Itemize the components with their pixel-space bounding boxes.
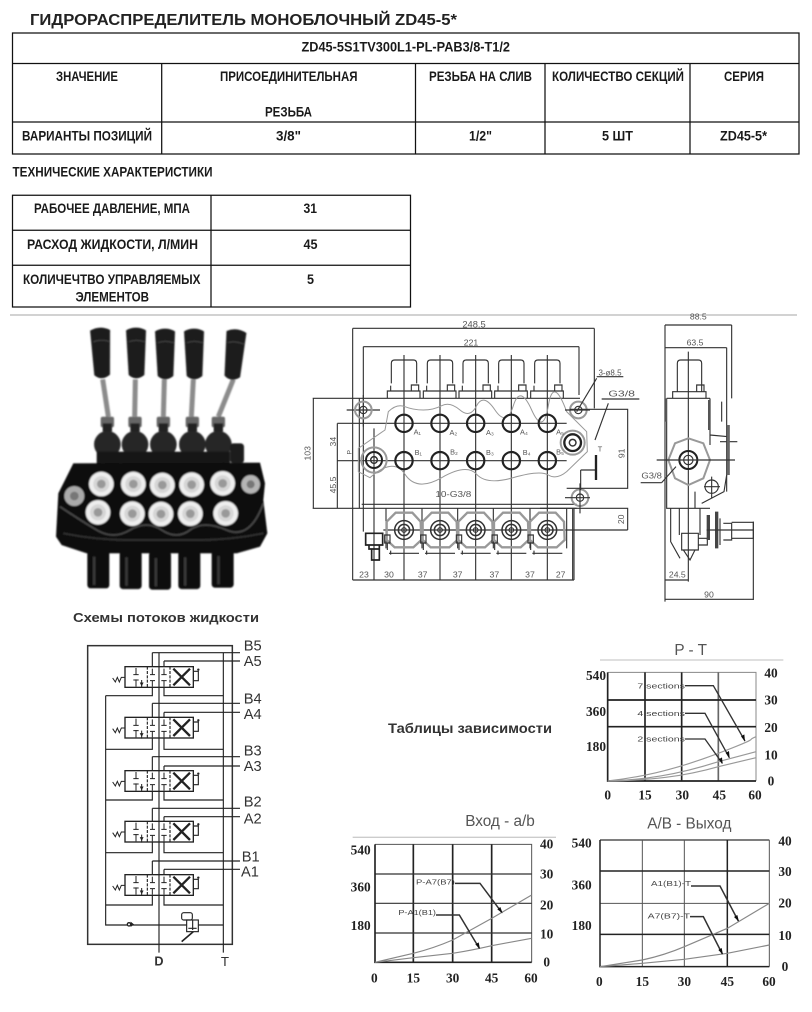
side view dimension labels: 88.5 (690, 312, 707, 322)
port labels (154, 639, 262, 969)
side view dimension labels: 24.5 (669, 570, 686, 580)
chart labels: P-A1(B1) (398, 908, 437, 917)
axis numbers: 20 (778, 896, 792, 911)
axis numbers: 540 (351, 842, 371, 857)
dimension labels: 37 (418, 570, 428, 580)
dimension labels: 10-G3/8 (435, 489, 472, 499)
value: drain thread: 1/2" (469, 128, 492, 144)
dimension labels: A₄ (520, 427, 528, 436)
axis numbers: 540 (586, 668, 606, 683)
header: количество секций: КОЛИЧЕСТВО СЕКЦИЙ (552, 67, 684, 84)
axis numbers: 0 (604, 787, 611, 802)
axis numbers: 60 (748, 787, 762, 802)
chart labels: A7(B7)-T (648, 912, 690, 921)
table: technical characteristics (12, 195, 410, 307)
chart labels: A1(B1)-T (651, 879, 691, 888)
dimension labels: P (347, 450, 354, 455)
port labels: A5 (244, 654, 262, 670)
chart labels (648, 879, 691, 921)
axis numbers: 0 (543, 955, 550, 970)
dimension labels: 37 (525, 570, 535, 580)
axis numbers: 0 (782, 959, 789, 974)
dimension labels: 45.5 (328, 476, 338, 493)
technical drawing: front view with dimensions (303, 320, 639, 580)
axis numbers: 180 (586, 739, 606, 754)
axis numbers: 180 (351, 918, 371, 933)
axis numbers: 30 (764, 692, 778, 707)
axis numbers (351, 837, 554, 986)
header: присоединительная резьба: ПРИСОЕДИНИТЕЛЬНАЯ (220, 68, 358, 84)
header: значение: ЗНАЧЕНИЕ (56, 68, 118, 84)
axis numbers: 20 (764, 720, 778, 735)
chart labels: P-A7(B7) (416, 877, 456, 886)
model code: ZD45-5S1TV300L1-PL-PAB3/8-T1/2 (302, 38, 510, 54)
header: присоединительная резьба (220, 68, 358, 120)
dimension labels: 248.5 (462, 320, 486, 330)
axis numbers (586, 666, 778, 802)
flow label: РАСХОД ЖИДКОСТИ, Л/МИН (27, 236, 198, 252)
axis numbers: 10 (540, 927, 554, 942)
valve sections (113, 667, 199, 896)
relief valve (182, 913, 198, 942)
dimension labels: 23 (359, 570, 369, 580)
dimension labels: A₂ (449, 428, 457, 437)
axis numbers: 10 (778, 928, 792, 943)
dimension labels: A₃ (486, 428, 494, 437)
dimension labels: 37 (453, 570, 463, 580)
pressure value: 31 (304, 200, 317, 216)
chart labels: 4 sections (637, 709, 685, 718)
axis numbers (572, 833, 792, 989)
controlled elements (23, 271, 201, 304)
port labels: D (154, 954, 164, 968)
chart: A/B to outlet (572, 815, 792, 989)
port labels: A2 (244, 811, 262, 827)
port labels: B4 (244, 691, 262, 707)
chart labels (637, 681, 685, 744)
dimension labels: A₅ (556, 427, 564, 436)
axis numbers: 45 (713, 787, 726, 802)
axis numbers: 15 (407, 971, 420, 986)
dimension labels: 221 (464, 338, 478, 348)
chart: A/B to outlet: A/B - Выход (647, 815, 731, 832)
axis numbers: 30 (446, 971, 460, 986)
dimension labels: 34 (328, 437, 338, 446)
port labels: A3 (244, 759, 262, 775)
value: sections: 5 ШТ (602, 128, 633, 144)
axis numbers: 30 (678, 974, 691, 989)
axis numbers: 40 (764, 666, 778, 681)
axis numbers: 540 (572, 836, 592, 851)
chart labels: 7 sections (637, 681, 685, 690)
port labels: A4 (244, 707, 262, 723)
port labels: A1 (241, 865, 259, 881)
chart labels: 2 sections (637, 735, 685, 744)
dimension labels: B₃ (486, 448, 494, 457)
flow: 45 (304, 236, 318, 252)
controlled elements: ЭЛЕМЕНТОВ (76, 288, 149, 304)
chart: inlet to a/b: Вход - a/b (465, 813, 535, 830)
axis numbers: 0 (371, 971, 378, 986)
axis numbers: 20 (540, 897, 554, 912)
side view dimension labels: 63.5 (687, 338, 704, 348)
axis numbers: 60 (762, 974, 776, 989)
header: присоединительная резьба: РЕЗЬБА (265, 104, 312, 120)
chart: inlet to a/b (351, 813, 556, 986)
header: резьба на слив: РЕЗЬБА НА СЛИВ (429, 68, 532, 84)
axis numbers: 360 (351, 880, 371, 895)
port labels: T (221, 954, 229, 969)
axis numbers: 30 (676, 787, 689, 802)
side view dimension labels: G3/8 (641, 470, 662, 480)
product photo: hydraulic valve (56, 327, 267, 590)
dimension labels: 3-ø8.5 (598, 369, 622, 378)
dimension labels: T (598, 445, 603, 454)
axis numbers: 30 (778, 864, 792, 879)
axis numbers: 15 (636, 974, 649, 989)
axis numbers: 0 (596, 974, 603, 989)
dimension labels: B₁ (415, 448, 423, 457)
dimension labels: 30 (384, 570, 394, 580)
port labels: B2 (244, 795, 262, 811)
dimension labels: 91 (616, 448, 626, 458)
dimension labels: A₁ (414, 427, 422, 436)
axis numbers: 360 (586, 704, 606, 719)
side view dimension labels: 90 (704, 590, 714, 600)
header: серия: СЕРИЯ (724, 68, 764, 84)
value: series: ZD45-5* (720, 128, 767, 144)
axis numbers: 60 (524, 971, 538, 986)
pressure: РАБОЧЕЕ ДАВЛЕНИЕ, МПА (34, 200, 190, 216)
dimension labels: B₅ (556, 447, 564, 456)
dimension labels: 103 (303, 446, 313, 461)
hydraulic schematic (88, 639, 262, 969)
axis numbers: 30 (540, 867, 554, 882)
axis numbers: 45 (485, 971, 499, 986)
caption: dependency tables: Таблицы зависимости (388, 721, 552, 736)
dimension labels: B₂ (450, 447, 458, 456)
dimension labels: B₄ (523, 448, 531, 457)
axis numbers: 40 (778, 833, 792, 848)
chart labels (398, 877, 456, 917)
dimension labels (303, 320, 635, 580)
chart: P - T (586, 642, 783, 802)
port labels: B3 (244, 744, 262, 760)
title: ГИДРОРАСПРЕДЕЛИТЕЛЬ МОНОБЛОЧНЫЙ ZD45-5* (30, 10, 458, 29)
port labels: B1 (242, 850, 260, 866)
axis numbers: 180 (572, 918, 592, 933)
axis numbers: 45 (721, 974, 734, 989)
value: thread: 3/8" (276, 128, 301, 144)
elements value: 5 (307, 271, 314, 287)
dimension labels: 37 (490, 570, 499, 580)
table: model code and options (12, 33, 799, 154)
axis numbers: 15 (638, 787, 652, 802)
axis numbers: 360 (572, 877, 592, 892)
axis numbers: 10 (764, 747, 778, 762)
caption: fluid flow diagrams: Схемы потоков жидкости (73, 611, 259, 625)
heading: technical characteristics: ТЕХНИЧЕСКИЕ ХАРАКТЕРИСТИКИ (12, 164, 212, 180)
port labels: B5 (244, 639, 262, 655)
dimension labels: 20 (616, 514, 626, 524)
chart: P - T: P - T (674, 642, 708, 659)
axis numbers: 40 (540, 837, 554, 852)
dimension labels: G3/8 (608, 389, 635, 399)
side view dimension labels (641, 312, 714, 600)
dimension labels: 27 (556, 570, 566, 580)
axis numbers: 0 (768, 773, 775, 788)
row label: ВАРИАНТЫ ПОЗИЦИЙ (22, 126, 152, 144)
controlled elements: КОЛИЧЕЧТВО УПРАВЛЯЕМЫХ (23, 271, 201, 287)
technical drawing: side view (641, 312, 753, 602)
